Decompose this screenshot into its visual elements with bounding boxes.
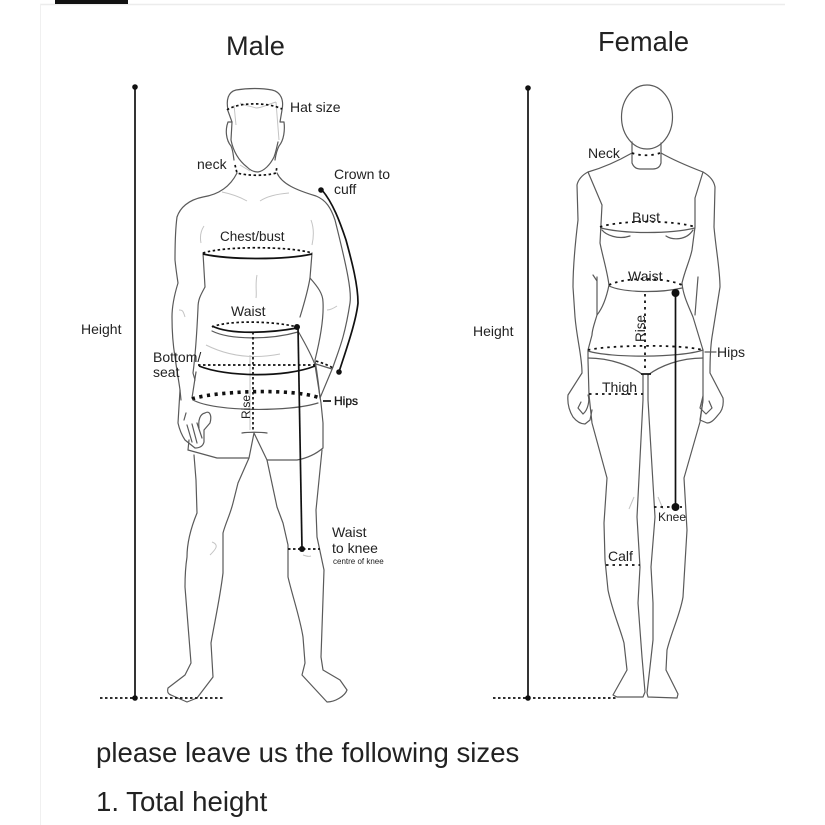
male labels: Height (81, 321, 122, 337)
male labels: Rise (239, 395, 253, 419)
male labels: to knee (332, 540, 378, 556)
heading: Male: Male (226, 30, 285, 61)
waist measure (212, 322, 298, 338)
female labels: Rise (633, 315, 648, 342)
male labels: Chest/bust (220, 229, 285, 244)
crown to cuff measure (316, 187, 358, 375)
male labels: Hips (334, 394, 358, 408)
female labels: Bust (632, 209, 660, 225)
female labels: Knee (658, 510, 686, 524)
waist to knee line (654, 289, 682, 511)
text block: instructions (96, 737, 519, 817)
female labels: Hips (717, 344, 745, 360)
male labels: seat (153, 364, 180, 380)
female labels: Neck (588, 145, 621, 161)
waist to knee measure (288, 324, 320, 552)
female labels: Waist (628, 268, 663, 284)
bottom seat measure (198, 365, 315, 375)
heading: Female: Female (598, 26, 689, 57)
male labels: neck (197, 156, 228, 172)
rise measure (242, 332, 267, 433)
chest measure (203, 248, 312, 258)
text block: instructions: please leave us the following sizes (96, 737, 519, 768)
hips measure (192, 392, 331, 409)
panel: male figure (81, 84, 390, 702)
thigh and calf measures (589, 394, 643, 565)
male labels (81, 99, 390, 566)
male labels: Bottom/ (153, 349, 201, 365)
male labels: Waist (332, 524, 367, 540)
female labels (473, 145, 745, 564)
bust measure (600, 222, 695, 232)
female labels: Calf (608, 548, 633, 564)
female labels: Thigh (602, 379, 637, 395)
female hips measure (588, 346, 716, 356)
panel: female figure (473, 85, 745, 701)
text block: instructions: 1. Total height (96, 786, 268, 817)
female waist measure (609, 279, 682, 292)
male labels: cuff (334, 181, 356, 197)
female labels: Height (473, 323, 514, 339)
male labels: Waist (231, 303, 266, 319)
female height line (493, 85, 618, 701)
top black tab (55, 0, 128, 4)
male body outline (168, 88, 350, 702)
neck measure (235, 165, 277, 175)
male labels: centre of knee (333, 557, 384, 566)
height line (100, 84, 225, 701)
male labels: Hat size (290, 99, 341, 115)
female body outline (568, 85, 723, 698)
hat size measure (227, 104, 282, 110)
male labels: Crown to (334, 166, 390, 182)
female neck measure (632, 153, 660, 155)
female rise measure (641, 294, 651, 374)
